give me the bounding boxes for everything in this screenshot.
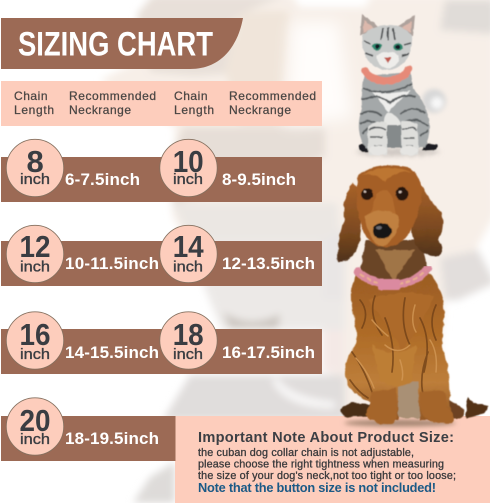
row: 8 and 10 inch: 8 (26, 144, 44, 179)
header band (1, 81, 322, 126)
column headings right: Recommended (229, 89, 316, 103)
row: 20 inch (1, 398, 176, 461)
column headings left: Length (14, 103, 54, 117)
note panel (175, 416, 490, 503)
row: 20 inch: inch (20, 432, 50, 448)
note emphasis: Note that the button size is not included! (198, 480, 436, 495)
row: 16 and 18 inch (1, 312, 322, 374)
row: 16 and 18 inch: 16-17.5inch (222, 343, 315, 362)
row: 8 and 10 inch: 10 (173, 144, 204, 179)
dog head (357, 165, 422, 247)
icon: dachshund wearing pink collar (338, 165, 489, 426)
note body (198, 447, 456, 482)
dog ears (338, 183, 364, 262)
title text: SIZING CHART (18, 26, 213, 64)
cat collar (365, 69, 409, 81)
column headings left: Neckrange (69, 103, 131, 117)
column headings left (14, 89, 156, 117)
row: 8 and 10 inch: 8-9.5inch (222, 170, 296, 189)
column headings right: Length (174, 103, 214, 117)
row: 16 and 18 inch: inch (20, 347, 50, 363)
icon: cat wearing collar (356, 14, 440, 156)
row: 20 inch: 18-19.5inch (65, 429, 159, 448)
row: 8 and 10 inch: inch (20, 172, 50, 188)
dog collar (358, 268, 428, 290)
note body: the cuban dog collar chain is not adjustable, (198, 447, 414, 459)
row: 12 and 14 inch: 12-13.5inch (222, 254, 315, 273)
column headings right (174, 89, 316, 117)
dog body (345, 270, 452, 420)
row: 8 and 10 inch (1, 139, 322, 202)
row: 8 and 10 inch: inch (173, 172, 203, 188)
row: 16 and 18 inch: inch (173, 347, 203, 363)
row: 8 and 10 inch: 6-7.5inch (65, 170, 140, 189)
row: 16 and 18 inch: 14-15.5inch (65, 343, 159, 362)
row: 16 and 18 inch: 16 (20, 317, 50, 352)
note body: please choose the right tightness when measuring (198, 458, 444, 470)
column headings left: Recommended (69, 89, 156, 103)
row: 12 and 14 inch: 10-11.5inch (65, 254, 159, 273)
column headings right: Neckrange (229, 103, 291, 117)
note body: the size of your dog's neck,not too tight or too loose; (198, 470, 456, 482)
row: 12 and 14 inch: 14 (173, 229, 204, 264)
row: 16 and 18 inch: 18 (173, 317, 204, 352)
row: 12 and 14 inch: 12 (20, 229, 50, 264)
row: 12 and 14 inch (1, 225, 322, 286)
column headings right: Chain (174, 89, 208, 103)
row: 20 inch: 20 (20, 403, 50, 438)
title banner (1, 18, 243, 69)
dog neck (360, 240, 428, 288)
ghost eye (422, 89, 446, 113)
note heading: Important Note About Product Size: (198, 430, 454, 446)
row: 12 and 14 inch: inch (20, 260, 50, 276)
column headings left: Chain (14, 89, 48, 103)
row: 12 and 14 inch: inch (173, 260, 203, 276)
